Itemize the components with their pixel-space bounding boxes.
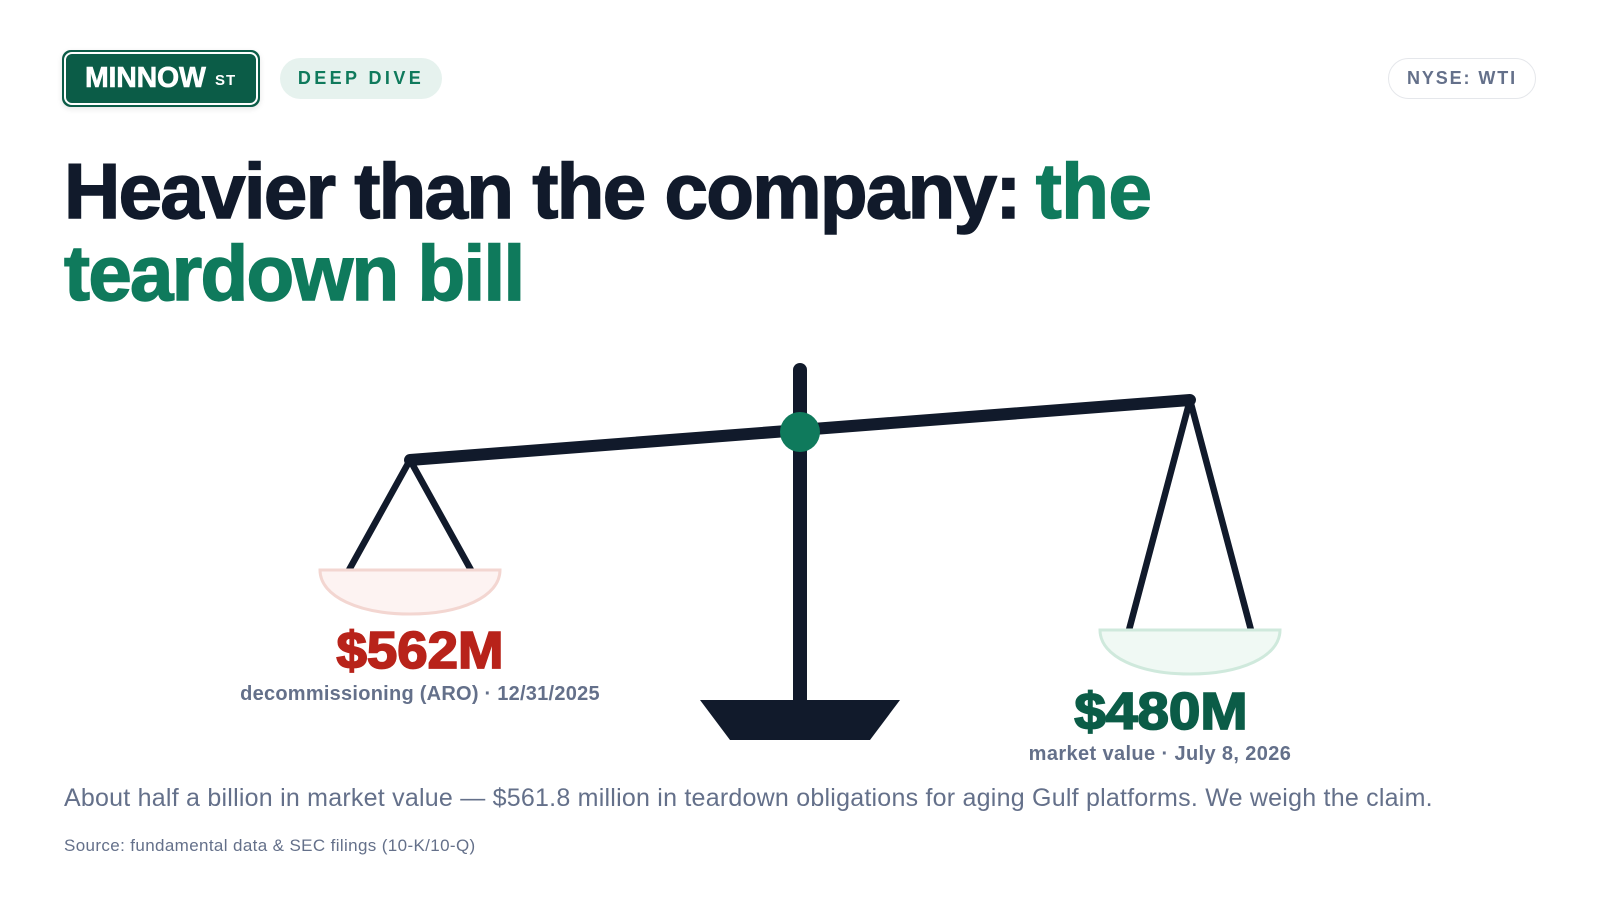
- ticker badge: NYSE: WTI: [1407, 68, 1517, 88]
- subtitle: About half a billion in market value — $561.8 million in teardown obligations for aging Gulf platforms. We weigh the claim.: [64, 784, 1433, 812]
- right value: $480M: [1074, 683, 1248, 741]
- left pan: [320, 570, 500, 614]
- source: Source: fundamental data & SEC filings (10-K/10-Q): [64, 836, 476, 855]
- left caption: decommissioning (ARO) · 12/31/2025: [240, 683, 600, 705]
- street sign logo: ST: [215, 72, 236, 89]
- street sign logo: [62, 50, 260, 107]
- right caption: market value · July 8, 2026: [1029, 743, 1291, 765]
- title: [64, 147, 1152, 317]
- deep dive tag: DEEP DIVE: [298, 68, 424, 88]
- street sign logo: MINNOW: [85, 62, 206, 94]
- ticker badge: [1388, 58, 1536, 99]
- beam: [410, 400, 1190, 460]
- right strings: [1129, 400, 1251, 630]
- title: teardown bill: [64, 229, 524, 317]
- base: [700, 700, 900, 740]
- post: [793, 370, 807, 702]
- title: Heavier than the company: the: [64, 147, 1152, 235]
- left value: $562M: [337, 622, 503, 680]
- pivot: [780, 412, 820, 452]
- deep dive tag: [280, 58, 442, 99]
- right pan: [1100, 630, 1280, 674]
- left strings: [349, 460, 471, 570]
